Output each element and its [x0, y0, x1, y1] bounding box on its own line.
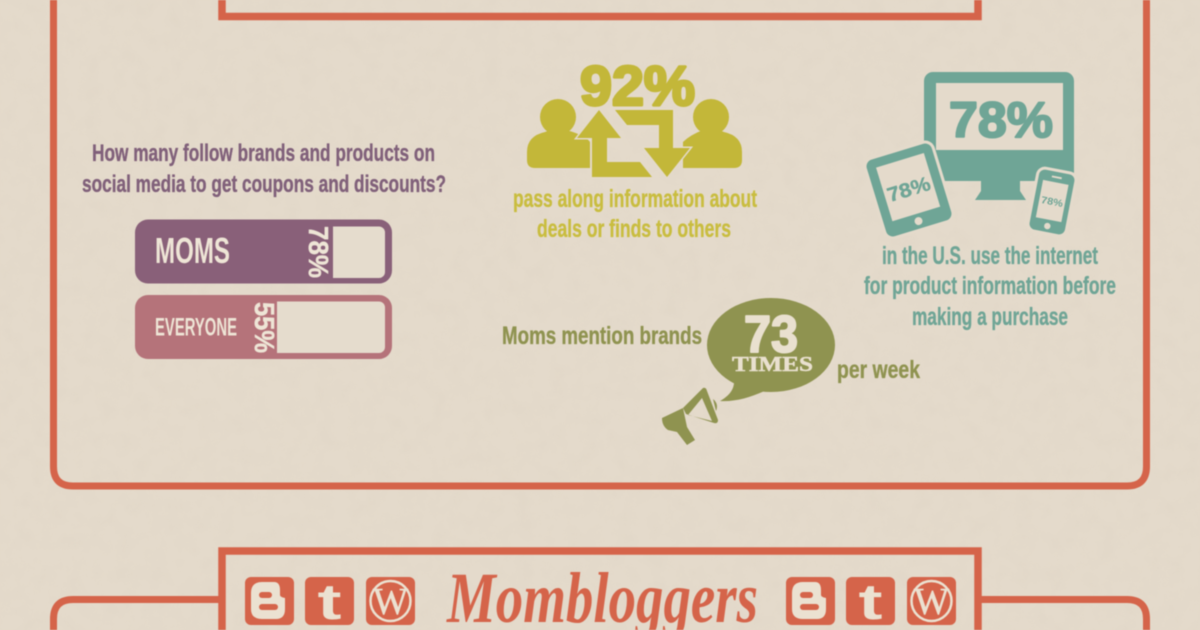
text: pass along information: deals or finds to others — [537, 215, 731, 243]
icon: desktop monitor 78% — [924, 72, 1074, 200]
icon: tablet 78%: 78% — [885, 173, 933, 207]
icon: people sharing with 92% — [527, 54, 742, 177]
panel: momblogger heading box — [222, 551, 978, 630]
text: moms mention brands: Moms mention brands — [502, 322, 702, 350]
icon: wordpress left: W — [373, 581, 408, 623]
text: social media question: How many follow brands and products on — [92, 140, 435, 167]
text: per week: per week — [837, 356, 920, 384]
icon: blogger right — [786, 577, 835, 625]
callout: 73 times bubble: 73 — [744, 306, 798, 364]
icon: phone 78%: 78% — [1040, 195, 1064, 210]
icon: desktop monitor 78%: 78% — [949, 92, 1053, 148]
bar chart: everyone 55%: 55% — [249, 302, 280, 353]
bar chart: moms 78%: MOMS — [155, 230, 230, 271]
panel: main frame — [54, 0, 1146, 486]
panel: lower frame — [54, 600, 1146, 630]
icon: wordpress right: W — [914, 581, 949, 623]
panel: top heading box — [222, 0, 978, 16]
icon: phone 78% — [1029, 169, 1075, 235]
icon: tumblr right: t — [858, 574, 883, 630]
text: social media question: social media to get coupons and discounts? — [82, 171, 446, 198]
icon: wordpress right — [907, 577, 956, 625]
callout: 73 times bubble — [707, 298, 835, 401]
icon: tumblr left: t — [318, 574, 342, 630]
text: pass along information — [513, 185, 757, 243]
bar chart: moms 78% — [135, 220, 392, 284]
text: internet product information: making a purchase — [912, 303, 1068, 331]
icon: blogger left — [245, 577, 294, 625]
callout: 73 times bubble: TIMES — [732, 352, 813, 376]
text: pass along information: pass along information about — [513, 185, 757, 213]
icon: tablet 78% — [865, 142, 953, 238]
icon: megaphone — [662, 388, 718, 445]
text: social media question — [82, 140, 446, 198]
text: internet product information — [864, 242, 1116, 331]
bar chart: everyone 55%: EVERYONE — [155, 314, 237, 342]
text: internet product information: in the U.S. use the internet — [882, 242, 1098, 270]
icon: wordpress left — [366, 577, 415, 625]
bar chart: moms 78%: 78% — [303, 226, 334, 278]
stat: 92%: 92% — [580, 54, 695, 117]
bar chart: everyone 55% — [135, 295, 392, 359]
icon: tumblr right — [846, 574, 895, 630]
icon: tumblr left — [305, 574, 354, 630]
